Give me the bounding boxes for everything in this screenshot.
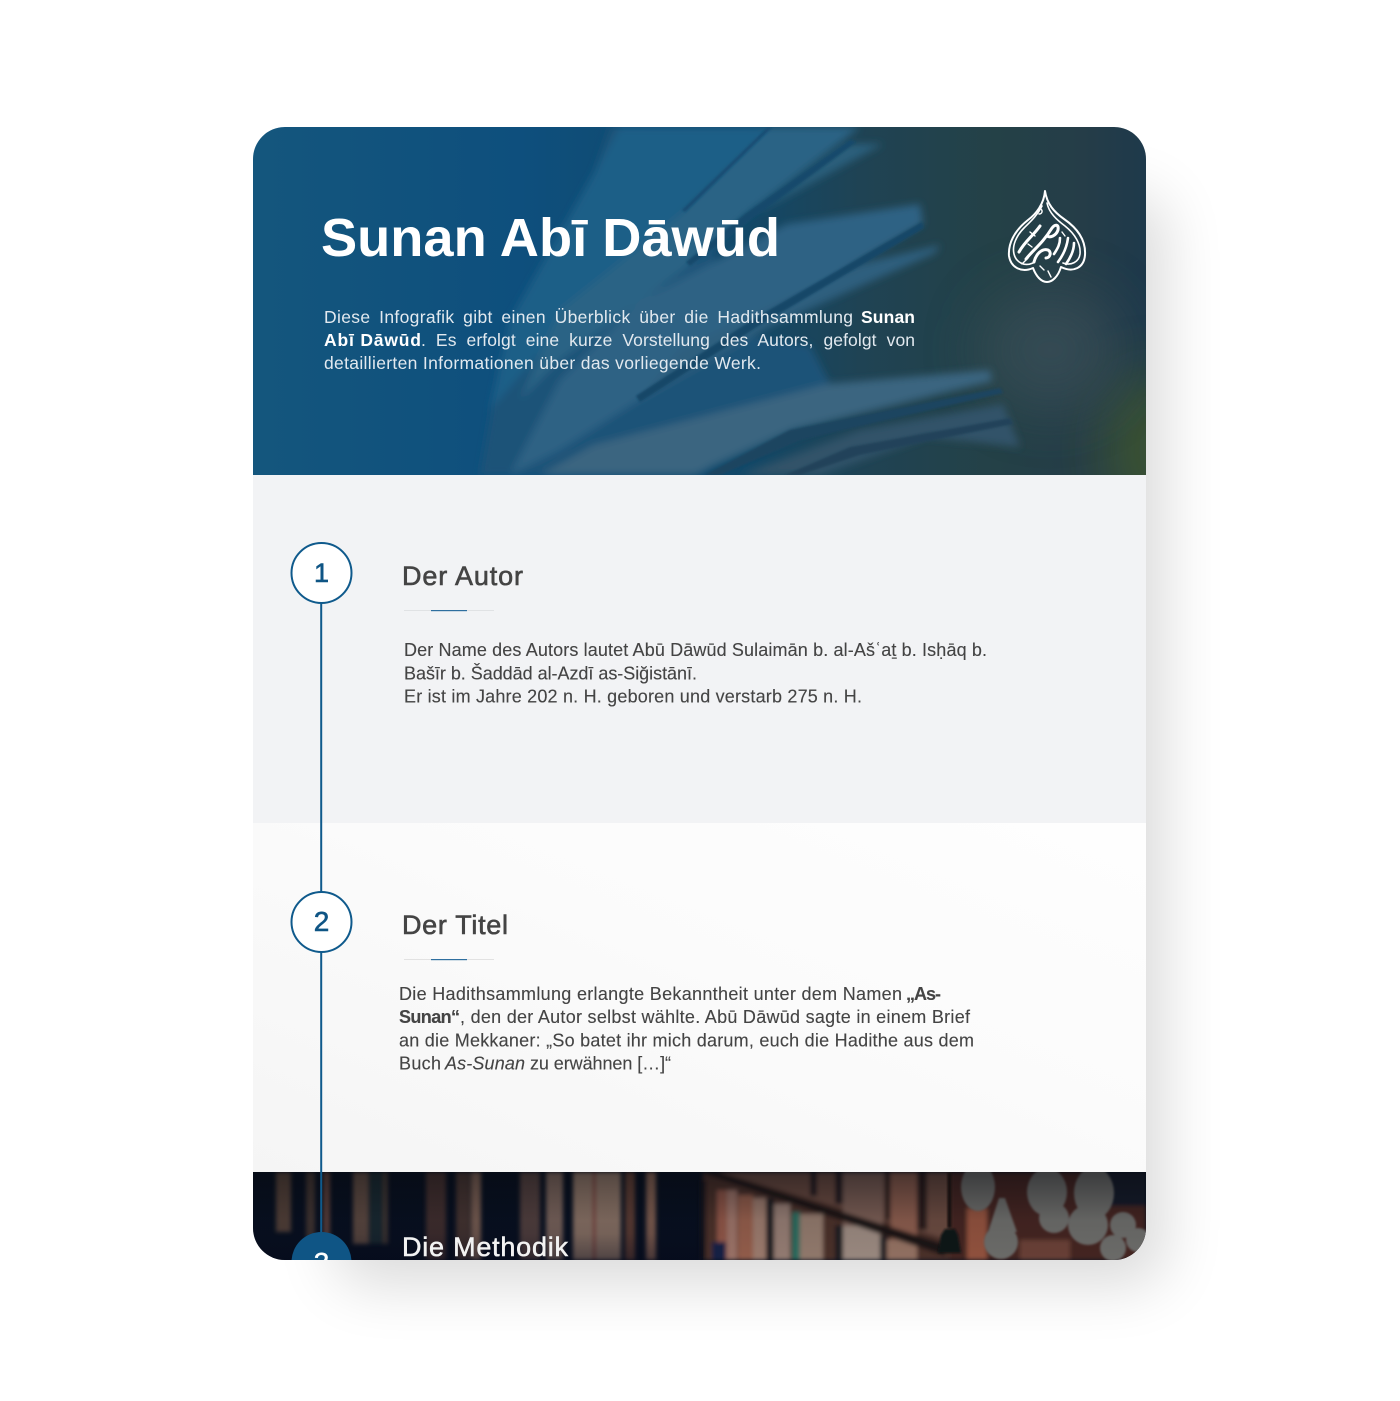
- text: der titel: Die Hadithsammlung erlangte Bekanntheit unter dem Namen: [399, 984, 902, 1004]
- text: der titel: Sunan“: [399, 1007, 460, 1027]
- intro text: [324, 307, 915, 373]
- infographic card: [253, 127, 1195, 1261]
- title: Sunan Abī Dāwūd: [321, 208, 780, 268]
- text: der titel: „As-: [906, 984, 941, 1004]
- intro text: Diese Infografik gibt einen Überblick über die Hadithsammlung: [324, 307, 853, 327]
- step 2 marker: 2: [314, 906, 329, 937]
- text: der autor: Er ist im Jahre 202 n. H. geboren und verstarb 275 n. H.: [404, 686, 862, 706]
- panel: die methodik: [253, 1172, 1146, 1260]
- panel: der autor: [253, 475, 1146, 823]
- step 1 marker: [292, 543, 352, 603]
- card shadow: [335, 195, 1165, 1285]
- heading: der titel: Der Titel: [402, 910, 508, 940]
- text: der autor: Der Name des Autors lautet Abū Dāwūd Sulaimān b. al-Ašʿaṯ b. Isḥāq b.: [404, 640, 987, 660]
- divider: der titel: [404, 959, 494, 960]
- divider: der autor: [404, 610, 494, 611]
- text: der titel: Buch: [399, 1054, 441, 1074]
- step 3 marker: 3: [314, 1247, 329, 1278]
- heading: die methodik: Die Methodik: [402, 1232, 568, 1262]
- intro text: . Es erfolgt eine kurze Vorstellung des Autors, gefolgt von: [421, 330, 915, 350]
- text: der titel: As-Sunan: [444, 1054, 525, 1074]
- step 1 marker: 1: [314, 558, 329, 588]
- step 2 marker: [292, 892, 352, 952]
- intro text: Sunan: [861, 307, 915, 327]
- text: der titel: an die Mekkaner: „So batet ihr mich darum, euch die Hadithe aus dem: [399, 1030, 974, 1050]
- timeline line: [320, 603, 322, 1233]
- text: der autor: [404, 640, 987, 706]
- text: der titel: , den der Autor selbst wählte. Abū Dāwūd sagte in einem Brief: [460, 1007, 971, 1027]
- intro text: detaillierten Informationen über das vorliegende Werk.: [324, 353, 761, 373]
- text: der titel: [399, 984, 974, 1074]
- icon: calligraphy logo: [1009, 191, 1085, 282]
- heading: der autor: Der Autor: [402, 561, 523, 591]
- intro text: Abī Dāwūd: [324, 330, 421, 350]
- panel: der titel: [253, 823, 1146, 1172]
- icon: hanging lamp: [938, 1172, 961, 1253]
- text: der titel: zu erwähnen […]“: [530, 1054, 671, 1074]
- text: der autor: Bašīr b. Šaddād al-Azdī as-Siğistānī.: [404, 662, 697, 684]
- panel: header: [253, 127, 1146, 475]
- step 3 marker: [292, 1232, 352, 1260]
